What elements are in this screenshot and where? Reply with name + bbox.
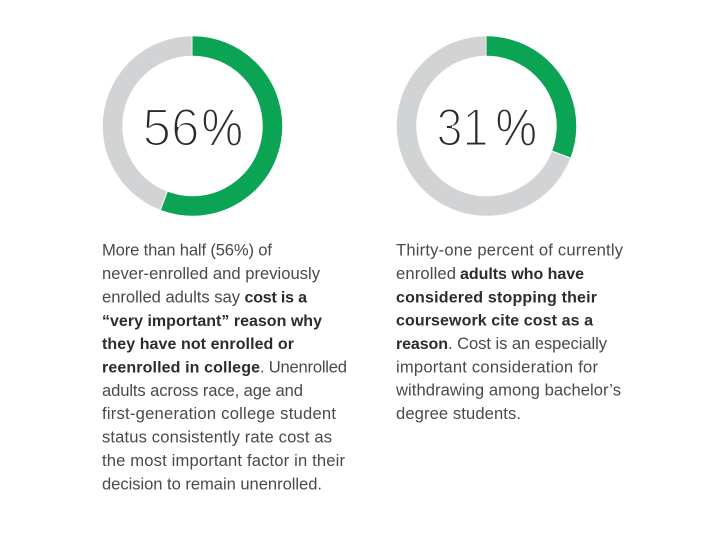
donut chart: 56% — [112, 46, 272, 206]
text block: left description: the most important factor in their — [102, 451, 345, 470]
text block: left description: . Unenrolled — [260, 358, 347, 376]
text block: left description: status consistently rate cost as — [102, 428, 332, 447]
text block: left description: More than half (56%) of — [102, 241, 272, 260]
value: 31% — [436, 98, 537, 158]
text block: right description: important consideration for — [396, 357, 598, 376]
text block: right description: withdrawing among bachelor’s — [395, 381, 621, 400]
value: 31%: % — [496, 98, 537, 158]
value: 56%: 56 — [142, 98, 200, 158]
text block: left description: adults across race, age and — [102, 381, 303, 400]
text block: right description: considered stopping their — [396, 289, 597, 306]
text block: left description: “very important” reason why — [102, 313, 322, 330]
text block: right description: adults who have — [460, 266, 584, 283]
text block: left description: never-enrolled and previously — [102, 264, 321, 283]
text block: right description: degree students. — [396, 404, 521, 423]
value: 31%: 31 — [436, 98, 488, 158]
text block: left description: enrolled adults say — [102, 287, 241, 306]
text block: left description: they have not enrolled or — [102, 336, 294, 353]
text block: left description: first-generation college student — [102, 404, 336, 423]
value: 56% — [142, 98, 243, 158]
text block: right description: reason — [396, 336, 448, 353]
text block: right description: Thirty-one percent of currently — [396, 241, 624, 260]
text block: left description — [102, 241, 347, 493]
value: 56%: % — [202, 98, 243, 158]
donut chart: 31% — [406, 46, 566, 206]
text block: left description: reenrolled in college — [102, 360, 260, 376]
text block: right description: coursework cite cost as a — [396, 313, 593, 330]
text block: right description: . Cost is an especially — [448, 334, 608, 353]
text block: left description: cost is a — [244, 289, 307, 306]
text block: right description: enrolled — [396, 264, 456, 283]
text block: right description — [395, 241, 624, 423]
text block: left description: decision to remain unenrolled. — [102, 474, 322, 493]
